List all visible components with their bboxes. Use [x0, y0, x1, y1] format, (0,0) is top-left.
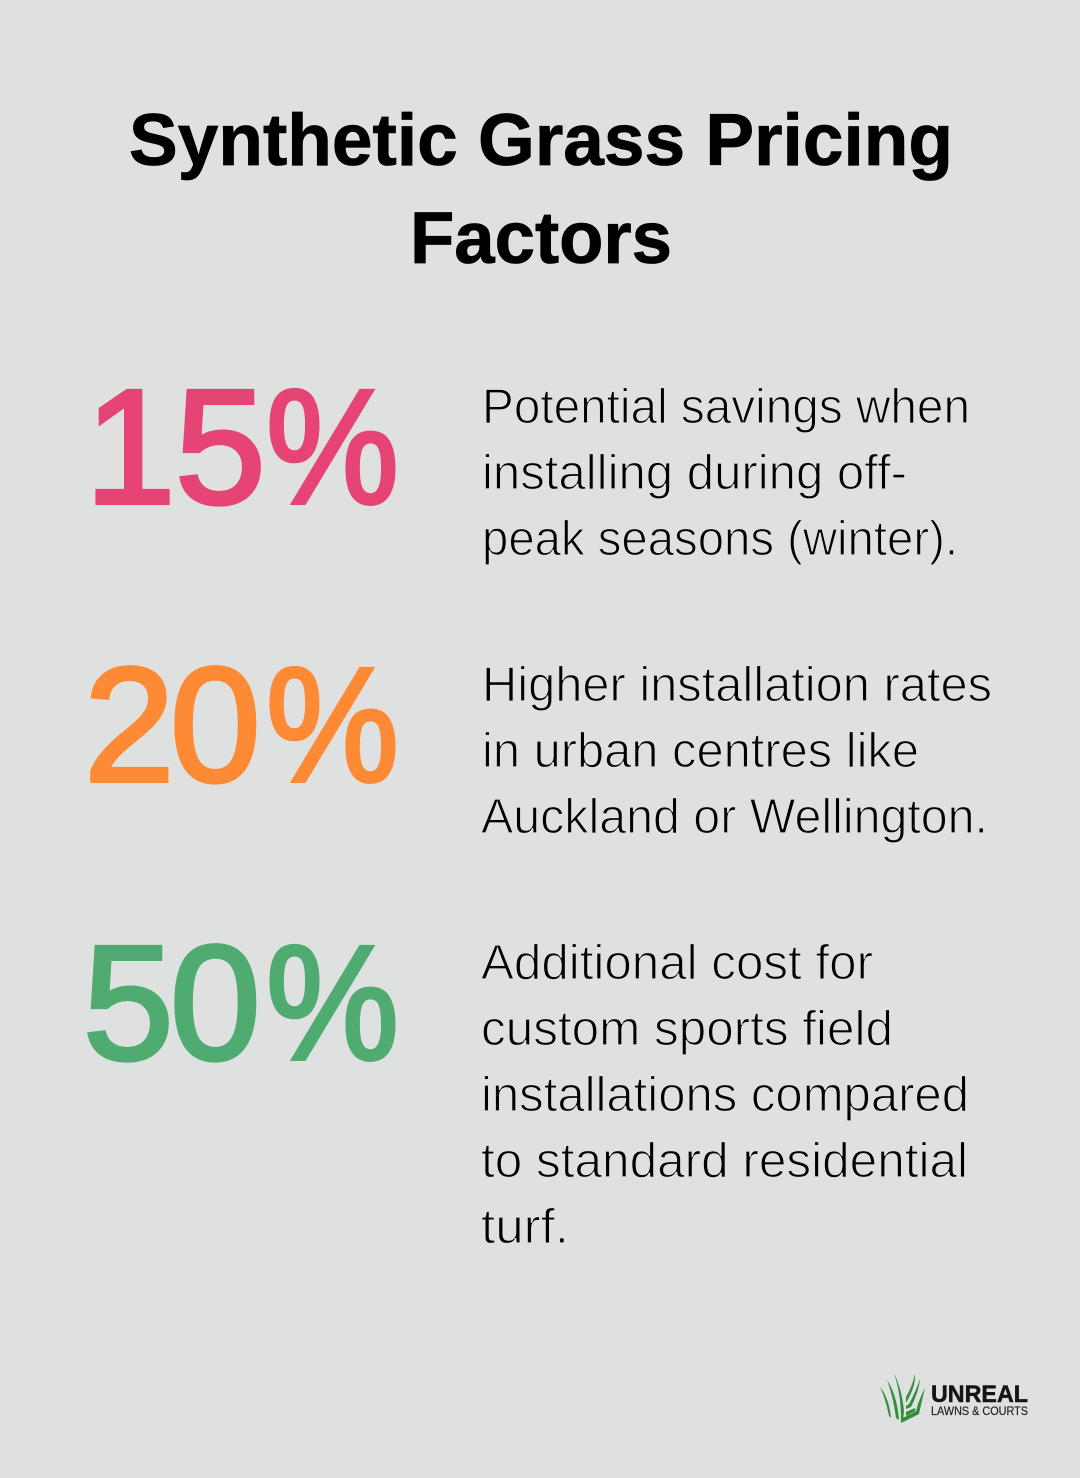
stat description: sports field cost: custom sports field — [481, 1002, 893, 1056]
title: Factors — [410, 198, 672, 279]
stat description: sports field cost: Additional cost for — [481, 936, 873, 990]
logo wordmark: UNREAL — [931, 1381, 1028, 1408]
stat description: urban rates: Auckland or Wellington. — [481, 790, 988, 844]
stat value: 50% — [83, 911, 399, 1094]
logo: Unreal Lawns & Courts — [880, 1373, 1028, 1423]
stat description: sports field cost: to standard residential — [481, 1134, 968, 1188]
stat: 50% — [83, 911, 969, 1254]
stat: 15% — [85, 355, 970, 566]
title: Synthetic Grass Pricing — [129, 100, 953, 181]
stat description: off-peak savings — [482, 380, 970, 566]
stat description: urban rates: Higher installation rates — [482, 658, 992, 712]
stat description: off-peak savings: installing during off- — [482, 446, 907, 500]
stat value: 15%: % — [266, 355, 399, 538]
stat description: sports field cost — [481, 936, 969, 1254]
stat value: 20%: 20 — [84, 633, 261, 816]
stat description: urban rates: in urban centres like — [482, 724, 919, 778]
logo wordmark: LAWNS & COURTS — [931, 1404, 1028, 1418]
stat value: 20% — [84, 633, 399, 816]
stat value: 20%: % — [266, 633, 399, 816]
stat value: 50%: % — [266, 911, 399, 1094]
title — [129, 100, 953, 279]
stat description: off-peak savings: peak seasons (winter). — [482, 512, 958, 566]
stat description: off-peak savings: Potential savings when — [482, 380, 970, 434]
stat value: 15%: 15 — [85, 355, 266, 538]
icon: grass blades — [880, 1373, 925, 1423]
stat value: 15% — [85, 355, 399, 538]
stat: 20% — [84, 633, 992, 844]
stat description: sports field cost: installations compared — [481, 1068, 969, 1122]
stat description: urban rates — [481, 658, 992, 844]
stat value: 50%: 50 — [83, 911, 261, 1094]
stat description: sports field cost: turf. — [481, 1200, 569, 1254]
